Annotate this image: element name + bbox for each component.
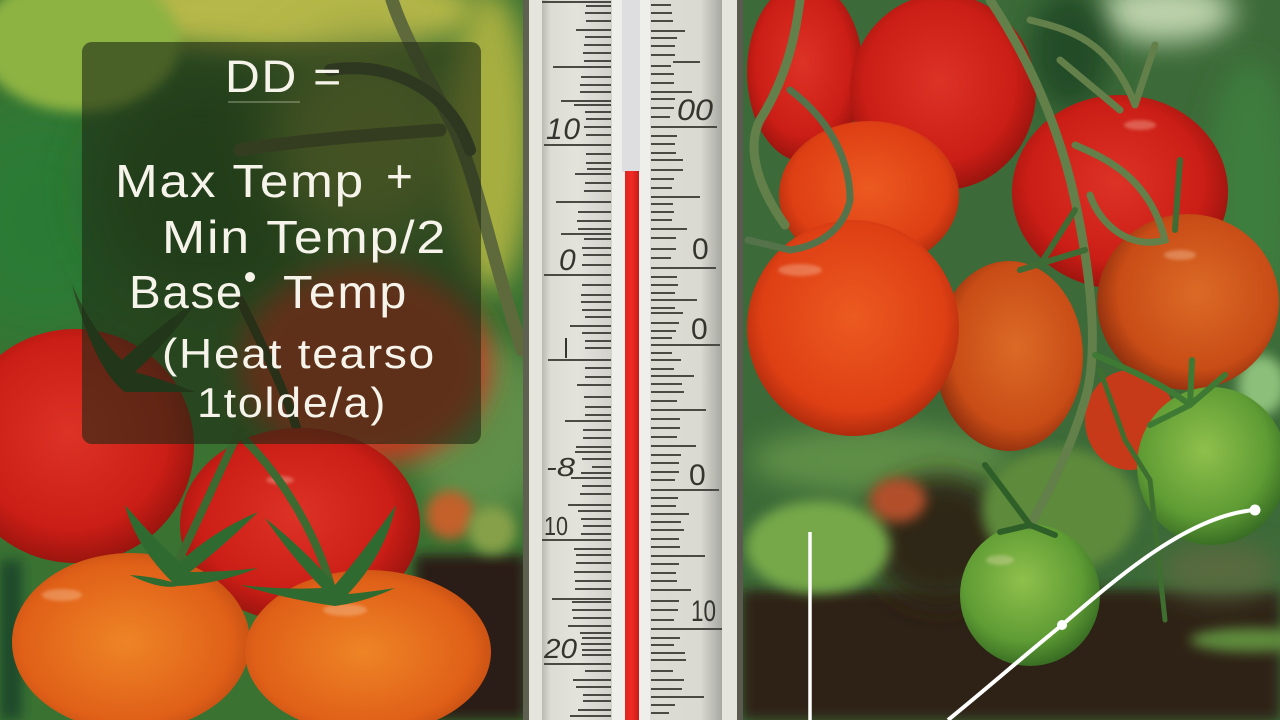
chart axis line	[808, 532, 812, 720]
tomato: large red left	[0, 329, 194, 563]
scale ticks left	[542, 2, 611, 716]
right foliage background	[742, 0, 1280, 720]
panel: right photo with tomatoes	[742, 0, 1280, 720]
thermometer frame	[523, 0, 743, 720]
tomato: red upper right	[1012, 95, 1228, 289]
scale plate right	[650, 0, 722, 720]
scale numbers right: 00	[677, 94, 713, 127]
growth curve	[948, 504, 1260, 720]
vines and calyx right	[748, 0, 1225, 620]
bullet dot	[245, 272, 255, 282]
formula title: DD =	[225, 51, 343, 102]
scale numbers right: 0	[689, 459, 706, 492]
scale numbers right	[677, 94, 716, 628]
tomato: orange bottom right	[245, 570, 491, 720]
glass tube	[612, 0, 650, 720]
formula note line one: (Heat tearso	[162, 330, 436, 377]
tomato: green right	[1137, 387, 1280, 545]
scale numbers left: 1 0	[546, 113, 580, 146]
tomato: orange bottom left	[12, 553, 250, 720]
tomato highlights right	[778, 120, 1196, 565]
tomato: orange red behind	[779, 121, 959, 252]
tomato: red behind green	[1085, 370, 1175, 470]
vine stem left	[240, 0, 522, 440]
tomato: red top	[850, 0, 1036, 190]
panel: left photo with tomatoes	[0, 0, 550, 720]
tomato highlights left	[42, 476, 367, 616]
scale mark left	[565, 338, 567, 358]
formula panel	[82, 42, 481, 444]
scale numbers left: 10	[544, 511, 568, 541]
scale numbers right: 0	[691, 313, 708, 346]
blurred green tomato top left	[0, 0, 180, 112]
plus sign: +	[386, 150, 413, 202]
tomato: red top left	[747, 0, 863, 162]
mercury column	[625, 171, 639, 720]
tomato: green bottom	[960, 524, 1100, 666]
vines and calyx left	[72, 285, 396, 606]
scale plate left	[542, 0, 612, 720]
formula line: max temp: Max Temp	[115, 155, 365, 207]
formula note line two: 1tolde/a)	[197, 379, 387, 426]
formula line: base: Base	[129, 266, 244, 318]
scale numbers left: -8	[546, 452, 576, 482]
scale numbers right: 10	[691, 595, 716, 628]
formula line: min temp: Min Temp/2	[162, 211, 447, 263]
scale numbers right: 0	[692, 233, 709, 266]
left foliage background	[0, 0, 550, 720]
tomato: orange right	[1097, 214, 1279, 390]
blurred background tomatoes	[746, 448, 1280, 652]
fraction line	[228, 101, 300, 103]
tomato: red centre	[180, 428, 420, 622]
scale numbers left: 20	[543, 633, 577, 664]
blurred tomato behind panel	[240, 265, 490, 465]
tomato: large orange red	[747, 220, 959, 436]
scale numbers left: 0	[559, 244, 576, 277]
formula line: temp: Temp	[283, 266, 408, 318]
tomato: orange middle	[935, 261, 1083, 451]
scale numbers left	[543, 113, 580, 664]
thermometer	[523, 0, 743, 720]
scale ticks right	[651, 5, 722, 713]
soil	[742, 475, 1280, 720]
